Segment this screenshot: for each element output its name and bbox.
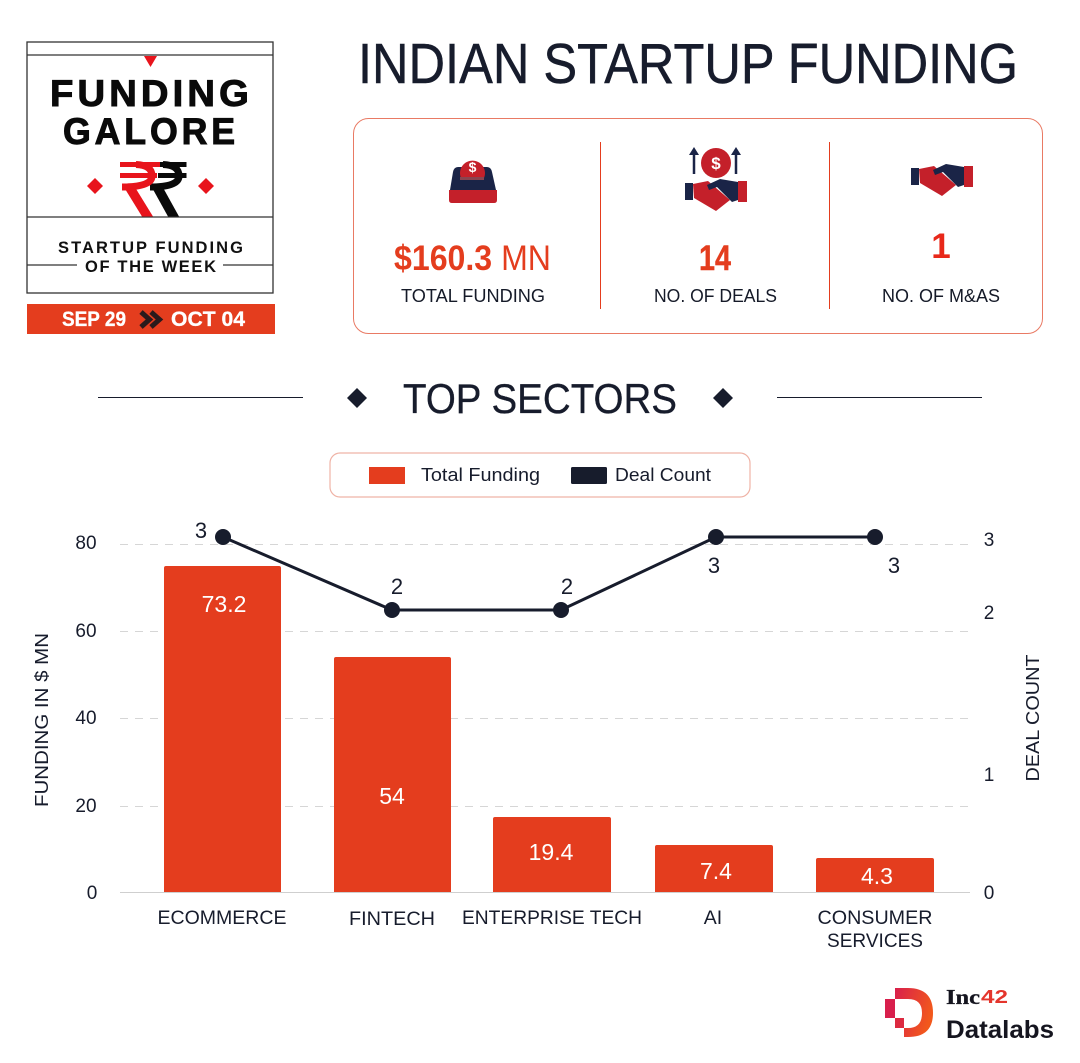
badge: funding galore xyxy=(27,42,273,293)
date banner: SEP 29 xyxy=(62,308,126,331)
icon: deals handshake with coin xyxy=(685,147,747,211)
category labels: AI xyxy=(704,907,722,929)
right axis: 1 xyxy=(984,765,994,786)
left axis title: FUNDING IN $ MN xyxy=(32,633,52,807)
deal count line xyxy=(223,537,875,610)
legend xyxy=(330,453,750,497)
stat: number of M&As: NO. OF M&AS xyxy=(882,286,1000,306)
category labels xyxy=(158,907,932,952)
right axis: 0 xyxy=(984,883,994,904)
date banner xyxy=(27,304,275,334)
left axis: 0 xyxy=(87,883,97,904)
heading: top sectors xyxy=(98,375,982,422)
right axis: 2 xyxy=(984,603,994,624)
stat: number of M&As xyxy=(882,227,1000,306)
deal count values: 2 xyxy=(561,574,573,599)
logo: Inc42 Datalabs: Datalabs xyxy=(946,1016,1054,1044)
bar values: 54 xyxy=(379,783,405,809)
bar values: 7.4 xyxy=(700,858,732,884)
right axis xyxy=(984,530,994,904)
bar values: 73.2 xyxy=(202,591,246,617)
legend: Deal Count xyxy=(615,465,711,485)
deal count values: 3 xyxy=(195,518,207,543)
logo: Inc42 Datalabs xyxy=(885,985,1054,1044)
stat: number of deals: 14 xyxy=(699,239,731,278)
icon: coin in box xyxy=(449,159,497,203)
deal count values: 3 xyxy=(708,553,720,578)
badge: funding galore: FUNDING xyxy=(50,73,253,114)
deal count values: 2 xyxy=(391,574,403,599)
category labels: CONSUMER xyxy=(818,907,932,929)
bar values: 4.3 xyxy=(861,863,893,889)
stat: total funding xyxy=(394,239,551,306)
right axis title: DEAL COUNT xyxy=(1023,655,1043,781)
heading: top sectors: TOP SECTORS xyxy=(403,375,677,422)
category labels: SERVICES xyxy=(827,930,923,952)
right axis: 3 xyxy=(984,530,994,551)
legend: Total Funding xyxy=(421,465,540,485)
stat: number of deals: NO. OF DEALS xyxy=(654,286,777,306)
badge: funding galore: GALORE xyxy=(63,111,239,152)
chart: funding bars and deal count line xyxy=(32,518,1043,952)
date banner: OCT 04 xyxy=(171,308,245,331)
icon: coin in box: $ xyxy=(469,159,477,175)
category labels: FINTECH xyxy=(349,908,435,930)
stat: total funding: TOTAL FUNDING xyxy=(401,286,545,306)
logo: Inc42 Datalabs: Inc xyxy=(946,985,980,1009)
badge: funding galore: STARTUP FUNDING xyxy=(58,239,243,257)
icon: handshake xyxy=(911,164,973,196)
bar values xyxy=(202,591,893,889)
stat: number of M&As: 1 xyxy=(931,227,951,266)
left axis xyxy=(75,533,97,904)
badge: funding galore: OF THE WEEK xyxy=(85,258,216,276)
left axis: 80 xyxy=(75,533,97,554)
icon: deals handshake with coin: $ xyxy=(711,154,721,173)
stat: total funding: $160.3 MN xyxy=(394,239,551,278)
left axis: 40 xyxy=(75,708,97,729)
left axis: 60 xyxy=(75,621,97,642)
category labels: ECOMMERCE xyxy=(158,907,286,929)
left axis: 20 xyxy=(75,796,97,817)
deal count values: 3 xyxy=(888,553,900,578)
bar values: 19.4 xyxy=(529,839,574,865)
stat: number of deals xyxy=(654,239,777,306)
category labels: ENTERPRISE TECH xyxy=(462,907,642,929)
logo: Inc42 Datalabs: 42 xyxy=(981,987,1008,1007)
bars xyxy=(164,566,934,892)
panel: key stats xyxy=(354,118,1042,334)
deal count values xyxy=(195,518,900,599)
title: INDIAN STARTUP FUNDING xyxy=(358,32,1018,96)
gridlines xyxy=(120,544,970,806)
